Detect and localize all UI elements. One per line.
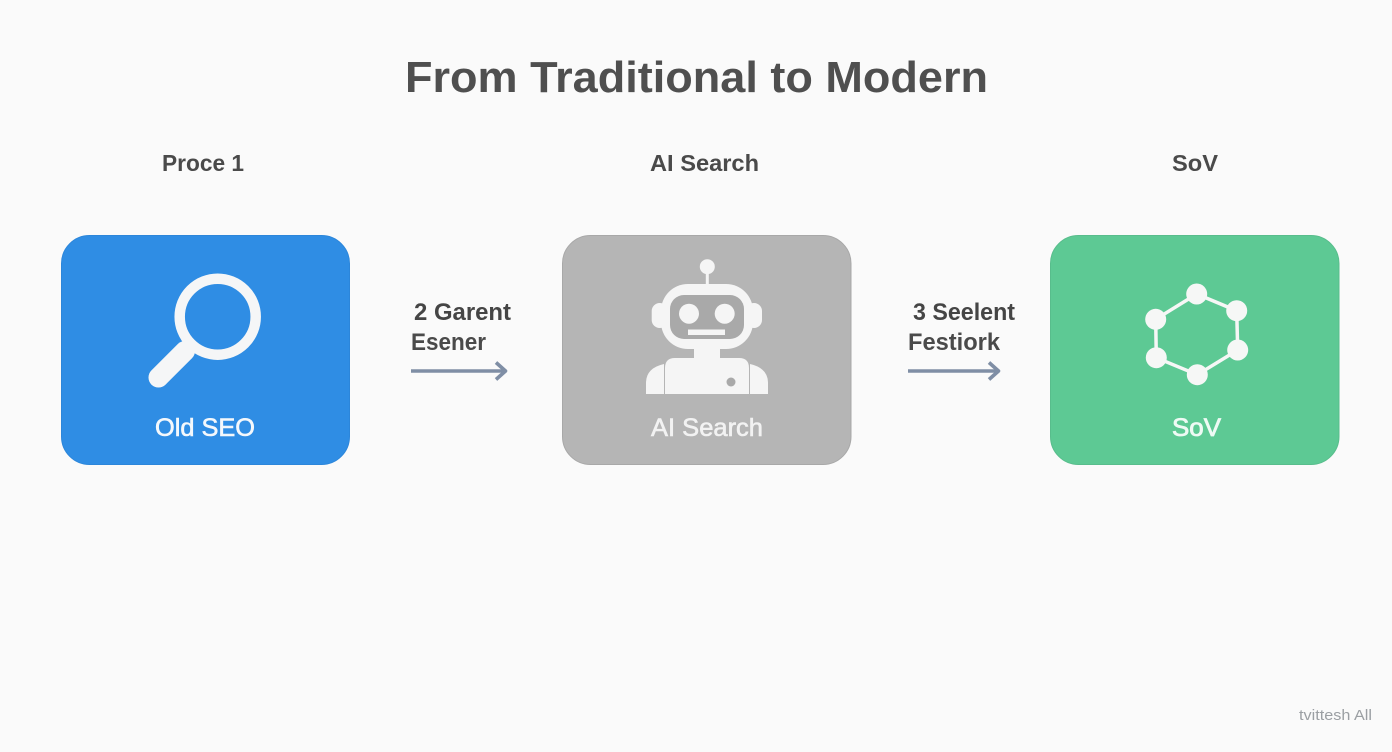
icon: hexagon network — [1145, 284, 1248, 385]
icon: robot — [646, 259, 768, 394]
label: Old SEO: Old SEO — [155, 414, 255, 442]
label: step 2 connector: 2 Garent — [414, 299, 511, 326]
icon: magnifying glass — [158, 279, 256, 378]
title: From Traditional to Modern — [405, 53, 988, 102]
label: step 2 connector: Esener — [411, 329, 486, 356]
footer note: tvittesh All — [1299, 707, 1372, 724]
heading: step 1: Proce 1 — [162, 150, 244, 176]
label: step 3 connector: Festiork — [908, 329, 1001, 356]
arrow: AI Search to SoV — [908, 362, 998, 380]
label: SoV: SoV — [1172, 414, 1221, 442]
heading: step 3: SoV — [1172, 150, 1219, 176]
panel: Old SEO — [62, 236, 350, 464]
label: step 3 connector — [908, 299, 1015, 356]
heading: step 2: AI Search — [650, 150, 759, 176]
panel: SoV — [1050, 236, 1339, 464]
label: step 2 connector — [411, 299, 511, 356]
label: AI Search: AI Search — [651, 414, 763, 442]
panel: AI Search — [562, 236, 851, 464]
label: step 3 connector: 3 Seelent — [913, 299, 1015, 326]
arrow: Old SEO to AI Search — [411, 362, 506, 380]
